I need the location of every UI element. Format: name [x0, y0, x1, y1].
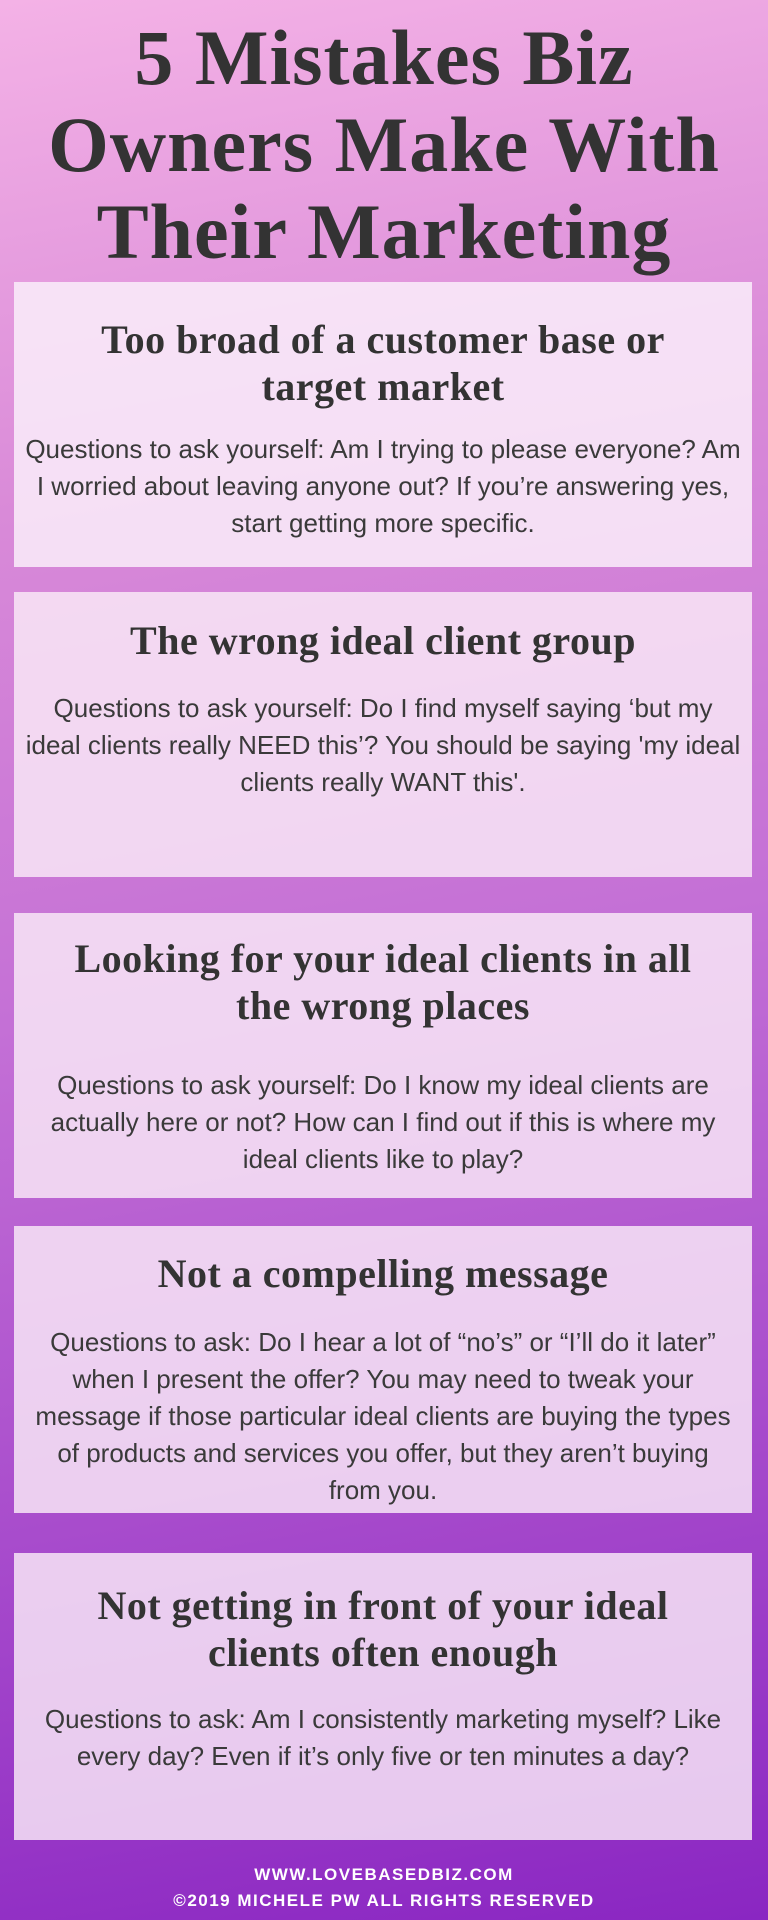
heading: wrong places: Looking for your ideal clients in all: [74, 936, 692, 981]
title: Owners Make With: [48, 101, 720, 188]
heading: too broad: [101, 317, 665, 409]
panel: wrong ideal client group: [14, 592, 752, 877]
heading: wrong ideal client group: The wrong ideal client group: [130, 618, 636, 663]
heading: wrong places: [74, 936, 692, 1028]
panel: often enough: [14, 1553, 752, 1840]
heading: compelling message: Not a compelling message: [158, 1251, 608, 1296]
text: wrong ideal client group: [26, 693, 740, 797]
text: compelling message: Questions to ask: Do I hear a lot of “no’s” or “I’ll do it later”: [50, 1327, 716, 1357]
heading: too broad: target market: [261, 364, 505, 409]
text: often enough: every day? Even if it’s only five or ten minutes a day?: [77, 1741, 689, 1771]
title: 5 Mistakes Biz: [134, 14, 634, 101]
text: compelling message: from you.: [329, 1475, 437, 1505]
text: too broad: start getting more specific.: [231, 508, 535, 538]
panel: too broad: [14, 282, 752, 567]
heading: often enough: [97, 1583, 669, 1675]
title: Their Marketing: [97, 188, 671, 275]
text: often enough: Questions to ask: Am I consistently marketing myself? Like: [45, 1704, 721, 1734]
heading: often enough: Not getting in front of your ideal: [97, 1583, 669, 1628]
footer: [173, 1865, 595, 1910]
text: wrong ideal client group: Questions to ask yourself: Do I find myself saying ‘but my: [54, 693, 712, 723]
text: wrong places: actually here or not? How can I find out if this is where my: [51, 1107, 715, 1137]
text: wrong places: [51, 1070, 716, 1174]
title: [48, 14, 720, 276]
text: too broad: Questions to ask yourself: Am I trying to please everyone? Am: [25, 434, 741, 464]
text: wrong ideal client group: clients really WANT this'.: [240, 767, 526, 797]
text: wrong ideal client group: ideal clients really NEED this’? You should be saying 'my ideal: [26, 730, 740, 760]
text: compelling message: message if those particular ideal clients are buying the types: [35, 1401, 731, 1431]
text: wrong places: ideal clients like to play?: [243, 1144, 523, 1174]
text: compelling message: [35, 1327, 731, 1505]
footer: WWW.LOVEBASEDBIZ.COM: [254, 1865, 514, 1884]
text: too broad: [25, 434, 741, 538]
panel: wrong places: [14, 913, 752, 1198]
footer: ©2019 MICHELE PW ALL RIGHTS RESERVED: [173, 1891, 595, 1910]
heading: often enough: clients often enough: [208, 1630, 558, 1675]
text: wrong places: Questions to ask yourself: Do I know my ideal clients are: [57, 1070, 709, 1100]
panel: compelling message: [14, 1226, 752, 1513]
text: often enough: [45, 1704, 721, 1771]
heading: too broad: Too broad of a customer base or: [101, 317, 665, 362]
text: too broad: I worried about leaving anyone out? If you’re answering yes,: [37, 471, 729, 501]
text: compelling message: when I present the offer? You may need to tweak your: [72, 1364, 694, 1394]
text: compelling message: of products and services you offer, but they aren’t buying: [57, 1438, 709, 1468]
heading: wrong places: the wrong places: [236, 983, 530, 1028]
